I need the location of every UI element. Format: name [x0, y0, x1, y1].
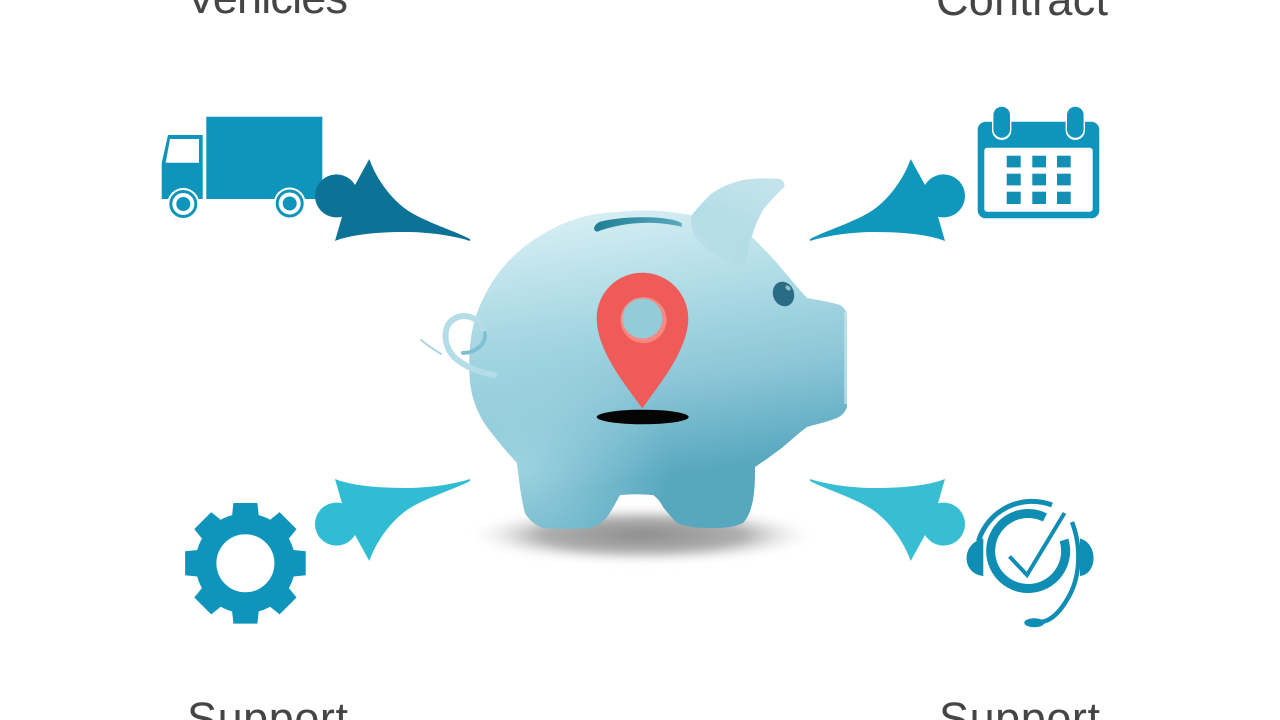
arrow: top-left dark teal — [315, 159, 470, 241]
arrow: bottom-right light teal — [810, 479, 965, 561]
icon: calendar — [978, 105, 1099, 218]
coin slot — [594, 217, 682, 232]
icon: delivery truck — [162, 117, 322, 220]
pig eye — [769, 279, 798, 309]
pin shadow — [597, 410, 689, 424]
pig ear — [691, 178, 784, 267]
ground shadow under piggy bank — [470, 507, 814, 563]
location pin — [597, 273, 688, 408]
arrow: bottom-left light teal — [315, 479, 470, 561]
snout rim — [844, 312, 847, 404]
icon: gear — [185, 503, 306, 624]
icon: support headset with check mark — [967, 501, 1094, 627]
pig body — [469, 178, 847, 529]
lighter lower-left body shading — [469, 210, 847, 529]
pig tail — [421, 316, 494, 375]
piggy bank — [421, 178, 847, 529]
arrow: top-right teal — [810, 159, 965, 241]
